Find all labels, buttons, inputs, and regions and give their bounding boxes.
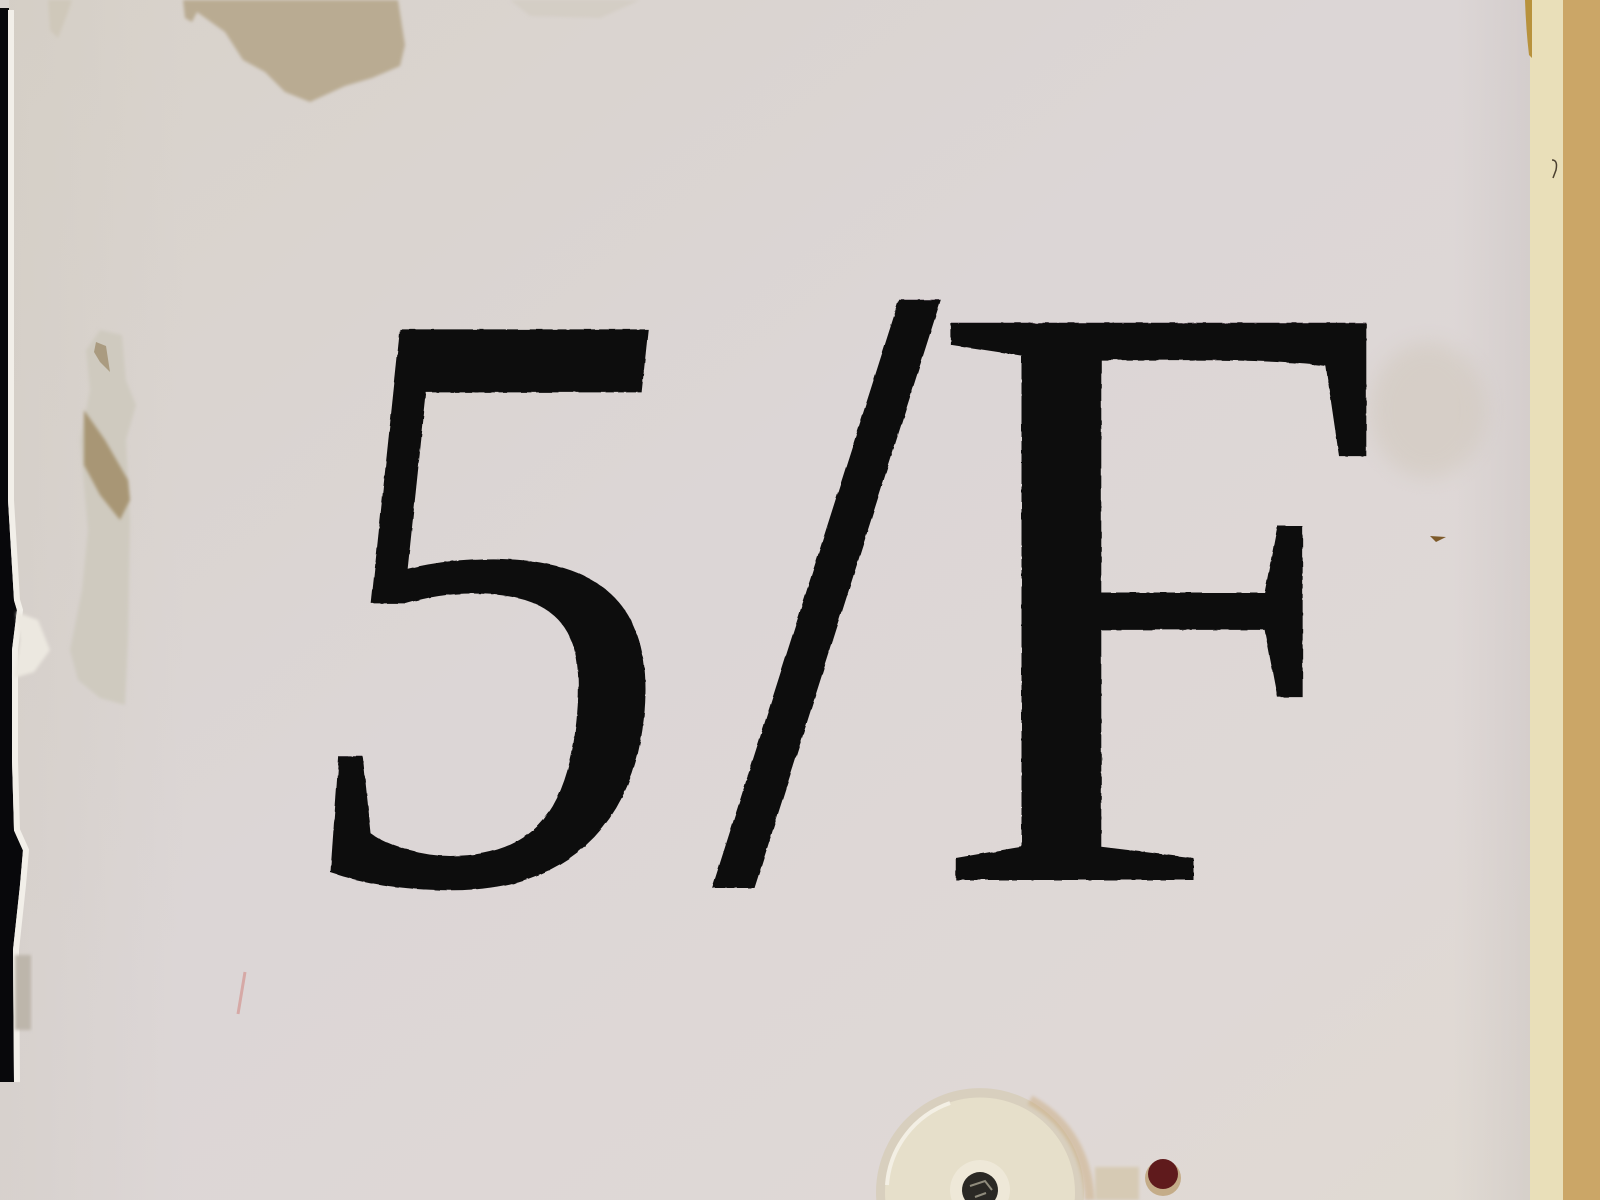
- small dark mark on trim: [1552, 160, 1556, 178]
- grey mark lower left: [15, 955, 31, 1030]
- letter F: F: [926, 122, 1397, 1064]
- slash: /: [714, 99, 942, 1068]
- white chipped left edge: [11, 10, 26, 1082]
- screw slot: [970, 1181, 992, 1197]
- peeled paint patch: left small: [94, 342, 110, 372]
- peeled paint patch: left column light: [70, 330, 136, 705]
- faint stain right of F: [1370, 342, 1486, 478]
- chipped plaster spot: [14, 612, 50, 678]
- cream trim strip: [1530, 0, 1563, 1200]
- scraped patch near hole: [1095, 1167, 1139, 1200]
- faint red scratch: [238, 972, 245, 1014]
- rust stain on right of button: [1030, 1100, 1090, 1200]
- small brown mark: [1430, 536, 1446, 542]
- sign lettering: 5/F: [263, 99, 1397, 1068]
- red screw hole: [1145, 1159, 1181, 1196]
- gold paint at top of trim: [1525, 0, 1532, 58]
- peeled paint faint patch: top left: [48, 0, 72, 38]
- rust stain ring around button: [876, 1088, 1084, 1200]
- screw washer: [950, 1160, 1010, 1200]
- wall button: round cover: [885, 1097, 1075, 1200]
- wood door frame at right: [1500, 0, 1600, 1200]
- numeral 5: 5: [263, 131, 735, 1066]
- peeled paint patch: top: [183, 0, 405, 102]
- peeled paint patch: left brown: [84, 410, 130, 520]
- button screw: [962, 1172, 998, 1200]
- black gap at left edge: [0, 8, 26, 1082]
- peeled paint faint patch: top centre: [510, 0, 640, 18]
- button highlight: [887, 1103, 950, 1185]
